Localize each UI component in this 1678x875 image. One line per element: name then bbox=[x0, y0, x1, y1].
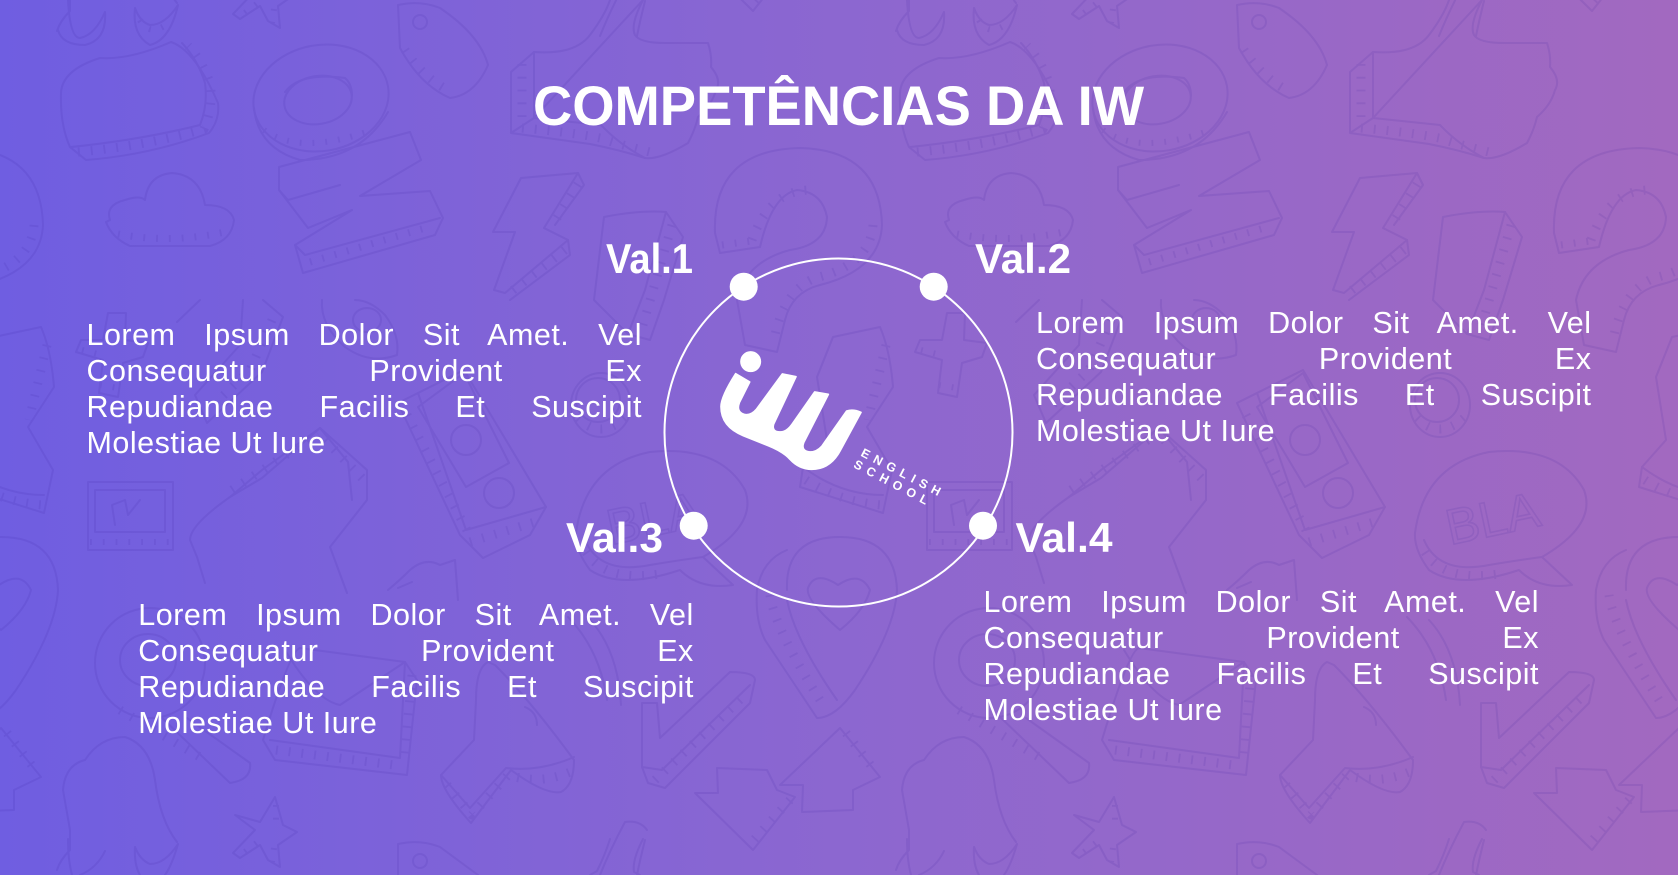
logo text: School: SCHOOL bbox=[851, 457, 931, 508]
text block: Val.4 description: Lorem Ipsum Dolor Sit Amet. Vel bbox=[984, 585, 1539, 619]
text block: Val.3 description bbox=[138, 598, 694, 740]
logo text: English: ENGLISH bbox=[859, 446, 943, 499]
label: Val.3: Val.3 bbox=[566, 514, 663, 561]
dot: Val.2 bbox=[920, 273, 948, 301]
text block: Val.2 description bbox=[1036, 306, 1592, 448]
title: COMPETÊNCIAS DA IW bbox=[533, 74, 1144, 137]
ring bbox=[664, 258, 1012, 606]
text block: Val.3 description: Molestiae Ut Iure bbox=[138, 706, 377, 740]
text block: Val.4 description: Consequatur Provident Ex bbox=[984, 621, 1539, 655]
dot: Val.1 bbox=[730, 273, 758, 301]
text block: Val.1 description: Lorem Ipsum Dolor Sit Amet. Vel bbox=[86, 318, 642, 352]
label: Val.2: Val.2 bbox=[975, 235, 1071, 282]
text block: Val.2 description: Molestiae Ut Iure bbox=[1036, 414, 1275, 448]
text block: Val.1 description bbox=[86, 318, 642, 460]
logo: IW English School bbox=[721, 352, 943, 508]
dot: Val.4 bbox=[969, 512, 997, 540]
text block: Val.1 description: Consequatur Provident Ex bbox=[86, 354, 642, 388]
icon: iw logo mark bbox=[721, 352, 861, 469]
text block: Val.4 description bbox=[984, 585, 1539, 727]
text block: Val.3 description: Repudiandae Facilis Et Suscipit bbox=[138, 670, 694, 704]
text block: Val.2 description: Consequatur Provident Ex bbox=[1036, 342, 1592, 376]
background doodle pattern: BLA bbox=[602, 481, 706, 556]
text block: Val.4 description: Repudiandae Facilis Et Suscipit bbox=[984, 657, 1539, 691]
text block: Val.1 description: Repudiandae Facilis Et Suscipit bbox=[86, 390, 642, 424]
text block: Val.1 description: Molestiae Ut Iure bbox=[86, 426, 326, 460]
background doodle pattern: BLA bbox=[1441, 481, 1545, 556]
text block: Val.3 description: Lorem Ipsum Dolor Sit Amet. Vel bbox=[138, 598, 694, 632]
dot: Val.3 bbox=[680, 512, 708, 540]
text block: Val.3 description: Consequatur Provident Ex bbox=[138, 634, 694, 668]
label: Val.4: Val.4 bbox=[1016, 514, 1113, 561]
text block: Val.2 description: Repudiandae Facilis Et Suscipit bbox=[1036, 378, 1592, 412]
label: Val.1: Val.1 bbox=[606, 235, 693, 282]
text block: Val.2 description: Lorem Ipsum Dolor Sit Amet. Vel bbox=[1036, 306, 1592, 340]
text block: Val.4 description: Molestiae Ut Iure bbox=[984, 693, 1223, 727]
ring diagram with four dots bbox=[664, 258, 1012, 606]
